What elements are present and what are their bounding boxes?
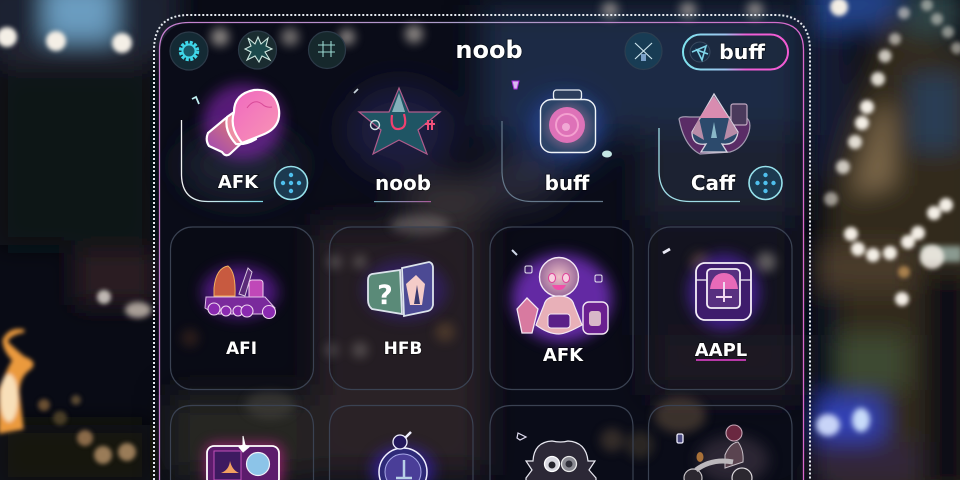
- panel interior bokeh: [160, 2, 805, 480]
- icon: fuzzy creature: [526, 441, 596, 480]
- card: HFB: [330, 227, 473, 390]
- tiny icon: shell: [517, 433, 526, 440]
- title: noob: [455, 36, 523, 64]
- icon: neon chest: [688, 254, 760, 330]
- bracket: [182, 120, 263, 202]
- label: AFK: AFK: [218, 172, 259, 193]
- tiny icon: device: [677, 434, 683, 443]
- tiny icon: arrow spark: [192, 97, 199, 104]
- card: AAPL: [648, 227, 792, 390]
- icon: toolbar star burst: [238, 31, 276, 69]
- card: fuzzy creature tile partially visible: [490, 406, 633, 480]
- icon: teal star: [359, 88, 440, 154]
- label: Caff: Caff: [691, 171, 736, 195]
- panel: glass app window: [154, 2, 810, 480]
- card: AFK glove tile: [182, 84, 308, 202]
- icon: round toolbar badge flower: [170, 32, 208, 70]
- card: buff jar tile: [502, 81, 612, 202]
- card: pocket watch tile partially visible: [330, 406, 473, 480]
- card: medal tile partially visible: [170, 406, 314, 480]
- icon: boxing glove: [203, 84, 283, 160]
- icon: spade and cards: [679, 94, 750, 154]
- icon: pocket watch: [371, 432, 435, 480]
- underline: [696, 359, 746, 361]
- card: Caff spade tile: [659, 94, 782, 202]
- pill label: buff: [719, 40, 765, 64]
- icon: toolbar grid hash: [308, 32, 346, 68]
- icon: pill emblem: [690, 42, 710, 62]
- button: buff pill: [683, 34, 788, 70]
- tiny icon: link spark: [354, 89, 358, 93]
- icon: double panel: [206, 436, 282, 480]
- label: noob: noob: [375, 171, 431, 195]
- tiny icon: eye: [602, 150, 612, 158]
- label: HFB: HFB: [384, 339, 422, 359]
- label: AFI: AFI: [226, 339, 257, 359]
- label: buff: buff: [545, 171, 590, 195]
- card: AFK character: [490, 227, 633, 390]
- bracket: [659, 128, 740, 202]
- icon: jar: [532, 90, 604, 157]
- bonfire flame: [0, 330, 32, 432]
- icon: mystery box: [363, 260, 447, 320]
- label: AFK: AFK: [543, 345, 584, 366]
- underline: [374, 201, 431, 202]
- panel dotted outer border: [154, 15, 810, 480]
- icon: neon character: [512, 250, 612, 342]
- icon: toolbar crossed arrows: [625, 32, 662, 70]
- tiny icon: shard: [512, 81, 519, 89]
- button: dots menu: [274, 166, 308, 200]
- icon: mystery box: ?: [377, 280, 393, 311]
- panel pink border: [160, 22, 804, 480]
- label: AAPL: AAPL: [695, 340, 747, 361]
- button: dots menu: [749, 166, 782, 200]
- bracket: [502, 121, 603, 202]
- icon: purple rover: [202, 266, 278, 318]
- tiny icon: pencil: [663, 249, 670, 253]
- card: AFI: [170, 227, 314, 390]
- card: rider tile partially visible: [648, 406, 792, 480]
- card: noob star tile: [354, 88, 440, 202]
- icon: motorbike rider: [684, 425, 769, 480]
